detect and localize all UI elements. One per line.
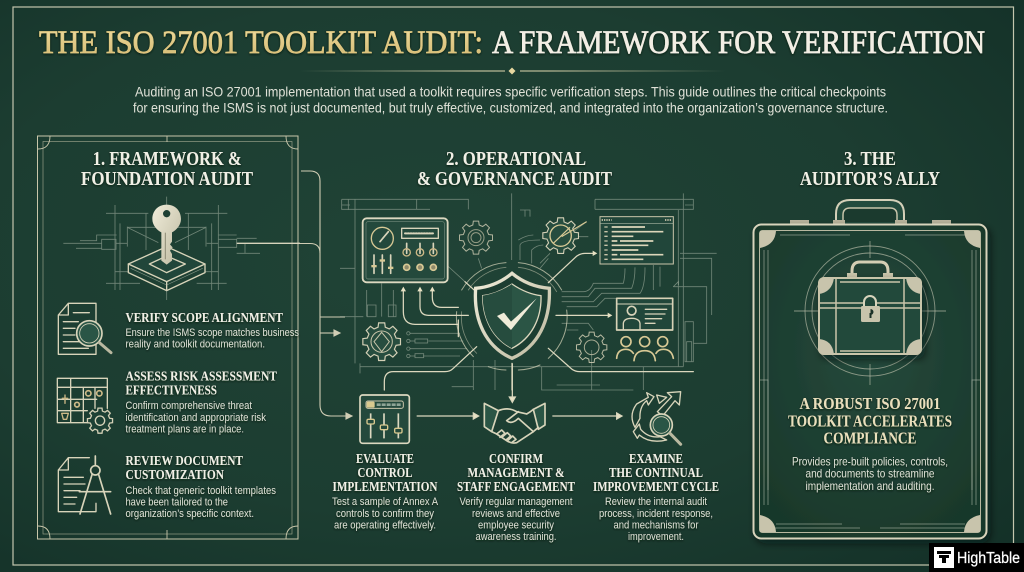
icon: handshake [484, 403, 545, 443]
intro text: for ensuring the ISMS is not just documented, but truly effective, customized, and integrated into the organization’s governance structure. [133, 100, 888, 116]
intro text [133, 84, 888, 116]
panel heading: FOUNDATION AUDIT [81, 168, 254, 190]
title: THE ISO 27001 TOOLKIT AUDIT: [39, 25, 483, 61]
checkpoint text: reality and toolkit documentation. [126, 338, 265, 350]
checkpoint text: CUSTOMIZATION [126, 467, 224, 482]
briefcase handle and clips [790, 200, 951, 224]
step text: awareness training. [476, 531, 556, 543]
step text: employee security [478, 520, 554, 532]
logo: HighTable: HighTable [957, 550, 1020, 567]
briefcase body [754, 224, 986, 538]
step text [332, 452, 438, 532]
briefcase text: COMPLIANCE [824, 428, 916, 448]
heading: the auditor's ally: AUDITOR’S ALLY [800, 168, 940, 190]
checkpoint text [126, 453, 276, 520]
checkpoint text: Check that generic toolkit templates [126, 485, 276, 497]
briefcase text: A ROBUST ISO 27001 [800, 394, 940, 413]
checkpoint text: Ensure the ISMS scope matches business [126, 327, 299, 339]
bottom row of operational checkpoints [332, 363, 719, 543]
checkpoint: assess risk assessment effectiveness [57, 369, 277, 436]
step text [593, 452, 719, 543]
checkpoint text [126, 369, 277, 436]
title divider [300, 68, 725, 74]
step: confirm management and staff engagement [457, 403, 576, 543]
central governance diagram [340, 193, 717, 390]
briefcase text: TOOLKIT ACCELERATES [788, 412, 952, 430]
icon: control sliders [360, 395, 409, 443]
panel: framework and foundation audit [38, 136, 300, 539]
icon: document window [600, 217, 673, 264]
briefcase text [788, 394, 952, 493]
step text: are operating effectively. [334, 520, 436, 532]
title: A FRAMEWORK FOR VERIFICATION [492, 25, 985, 61]
step: evaluate control implementation [332, 395, 438, 532]
step text: EVALUATE [356, 452, 414, 467]
title [39, 25, 985, 61]
checkpoint text: treatment plans are in place. [126, 424, 244, 436]
step text: Verify regular management [460, 496, 573, 508]
icon: presenter and audience [617, 298, 673, 361]
icon: document with compass [58, 456, 111, 514]
step text: IMPROVEMENT CYCLE [593, 480, 719, 495]
checkpoint text: EFFECTIVENESS [126, 383, 217, 398]
briefcase text: implementation and auditing. [806, 480, 934, 493]
icon: shield with check mark [475, 273, 549, 358]
step text: and mechanisms for [614, 520, 699, 532]
step text: Test a sample of Annex A [332, 496, 438, 508]
checkpoint text: have been tailored to the [126, 496, 228, 508]
checkpoint text [126, 310, 299, 350]
step text [457, 452, 576, 543]
step text: THE CONTINUAL [609, 466, 703, 481]
logo: HighTable [929, 543, 1024, 572]
checkpoint text: ASSESS RISK ASSESSMENT [126, 369, 277, 384]
heading: operational and governance audit [417, 148, 613, 190]
arrows and rings around the shield [384, 253, 693, 390]
checkpoint text: organization’s specific context. [126, 508, 254, 520]
step text: EXAMINE [629, 452, 683, 467]
step text: STAFF ENGAGEMENT [457, 480, 576, 495]
step text: process, incident response, [599, 508, 713, 520]
checkpoint text: VERIFY SCOPE ALIGNMENT [126, 310, 283, 325]
panel heading: 1. FRAMEWORK & [93, 148, 242, 170]
checkpoint: verify scope alignment [58, 303, 299, 354]
step text: controls to confirm they [336, 508, 434, 520]
checkpoint text: Confirm comprehensive threat [126, 400, 253, 412]
step text: improvement. [628, 531, 684, 543]
heading: operational and governance audit: 2. OPERATIONAL [446, 148, 586, 170]
checkpoint text: REVIEW DOCUMENT [126, 453, 243, 468]
icon: control panel [363, 218, 448, 282]
step text: reviews and effective [472, 508, 560, 520]
intro text: Auditing an ISO 27001 implementation that used a toolkit requires specific verification steps. This guide outlines the critical checkpoints [135, 84, 886, 100]
step: examine the continual improvement cycle [593, 392, 719, 543]
step text: IMPLEMENTATION [332, 480, 438, 495]
icon: document with magnifier [58, 303, 111, 354]
briefcase text: and documents to streamline [806, 468, 934, 481]
checkpoint: review document customization [58, 453, 276, 520]
heading: the auditor's ally: 3. THE [844, 148, 896, 170]
icon: risk matrix with gear [57, 378, 113, 433]
briefcase text: Provides pre-built policies, controls, [792, 456, 948, 468]
blueprint grid [340, 193, 717, 390]
step text: Review the internal audit [605, 496, 708, 508]
connector lines from panel 1 [300, 171, 352, 419]
icon: key on pedestal [63, 197, 300, 300]
checkpoint text: identification and appropriate risk [126, 412, 266, 424]
panel heading [81, 148, 254, 190]
icon: improvement cycle with magnifier [632, 392, 681, 444]
icon: gears [363, 218, 607, 363]
heading: operational and governance audit: & GOVERNANCE AUDIT [417, 168, 613, 190]
panel: briefcase [754, 200, 986, 538]
step text: MANAGEMENT & [468, 466, 564, 481]
step text: CONFIRM [489, 452, 543, 467]
heading: the auditor's ally [800, 148, 940, 190]
panel frame [38, 136, 298, 539]
step text: CONTROL [358, 466, 412, 481]
icon: small briefcase with padlock [794, 241, 946, 385]
arrows between steps [417, 363, 622, 419]
